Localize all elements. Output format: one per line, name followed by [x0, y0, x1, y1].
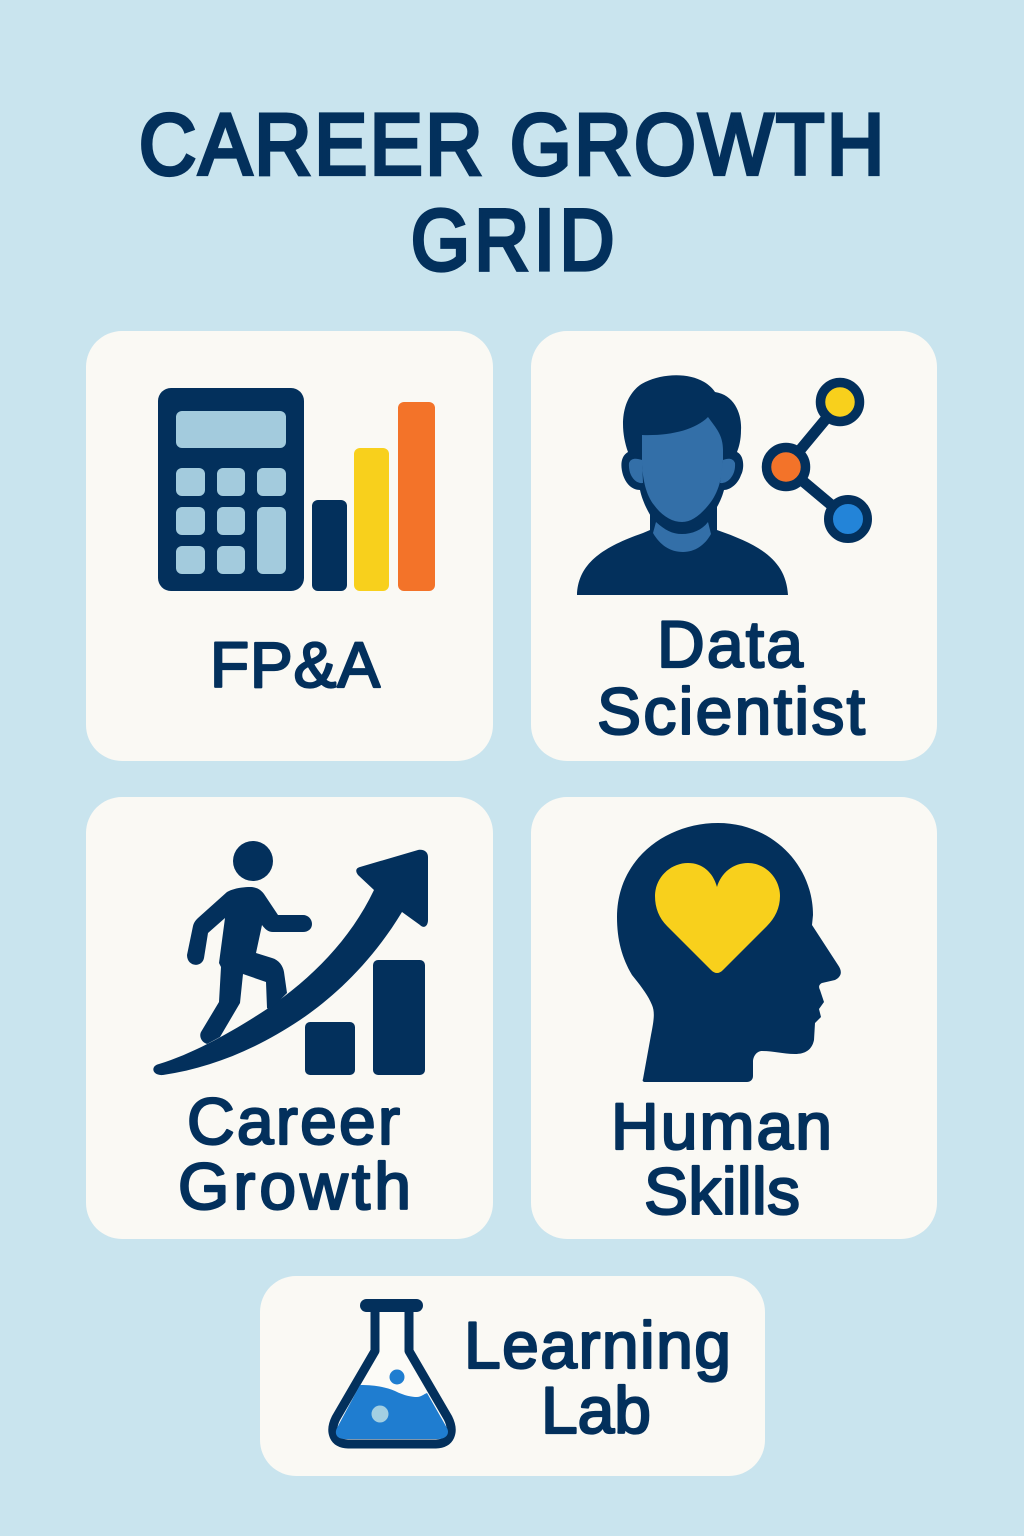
label: FP&A: FP&A [210, 629, 380, 701]
icon: flask [333, 1299, 451, 1444]
icon: calculator and bar chart [158, 388, 435, 591]
label: Data Scientist [597, 607, 865, 748]
panel: Human Skills [531, 797, 937, 1239]
label: Learning Lab: Lab [541, 1373, 651, 1447]
title [139, 96, 884, 289]
icon: head with heart [617, 823, 841, 1082]
label: Career Growth [178, 1084, 411, 1223]
panel: Learning Lab [260, 1276, 765, 1476]
label: Data Scientist: Scientist [597, 674, 865, 748]
label: Human Skills: Skills [644, 1154, 800, 1228]
title: CAREER GROWTH [139, 96, 884, 193]
panel: FP&A [86, 331, 493, 761]
icon: figure climbing growth arrow [153, 841, 428, 1075]
label: Human Skills [611, 1089, 832, 1228]
label: Career Growth: Career [187, 1084, 400, 1158]
panel: Career Growth [86, 797, 493, 1239]
label: Human Skills: Human [611, 1089, 832, 1163]
label: Learning Lab [464, 1308, 731, 1447]
icon: person with network nodes [577, 375, 868, 595]
panel: Data Scientist [531, 331, 937, 761]
label: Data Scientist: Data [657, 607, 803, 681]
label: Learning Lab: Learning [464, 1308, 731, 1382]
label: Career Growth: Growth [178, 1149, 411, 1223]
title: GRID [411, 193, 614, 289]
